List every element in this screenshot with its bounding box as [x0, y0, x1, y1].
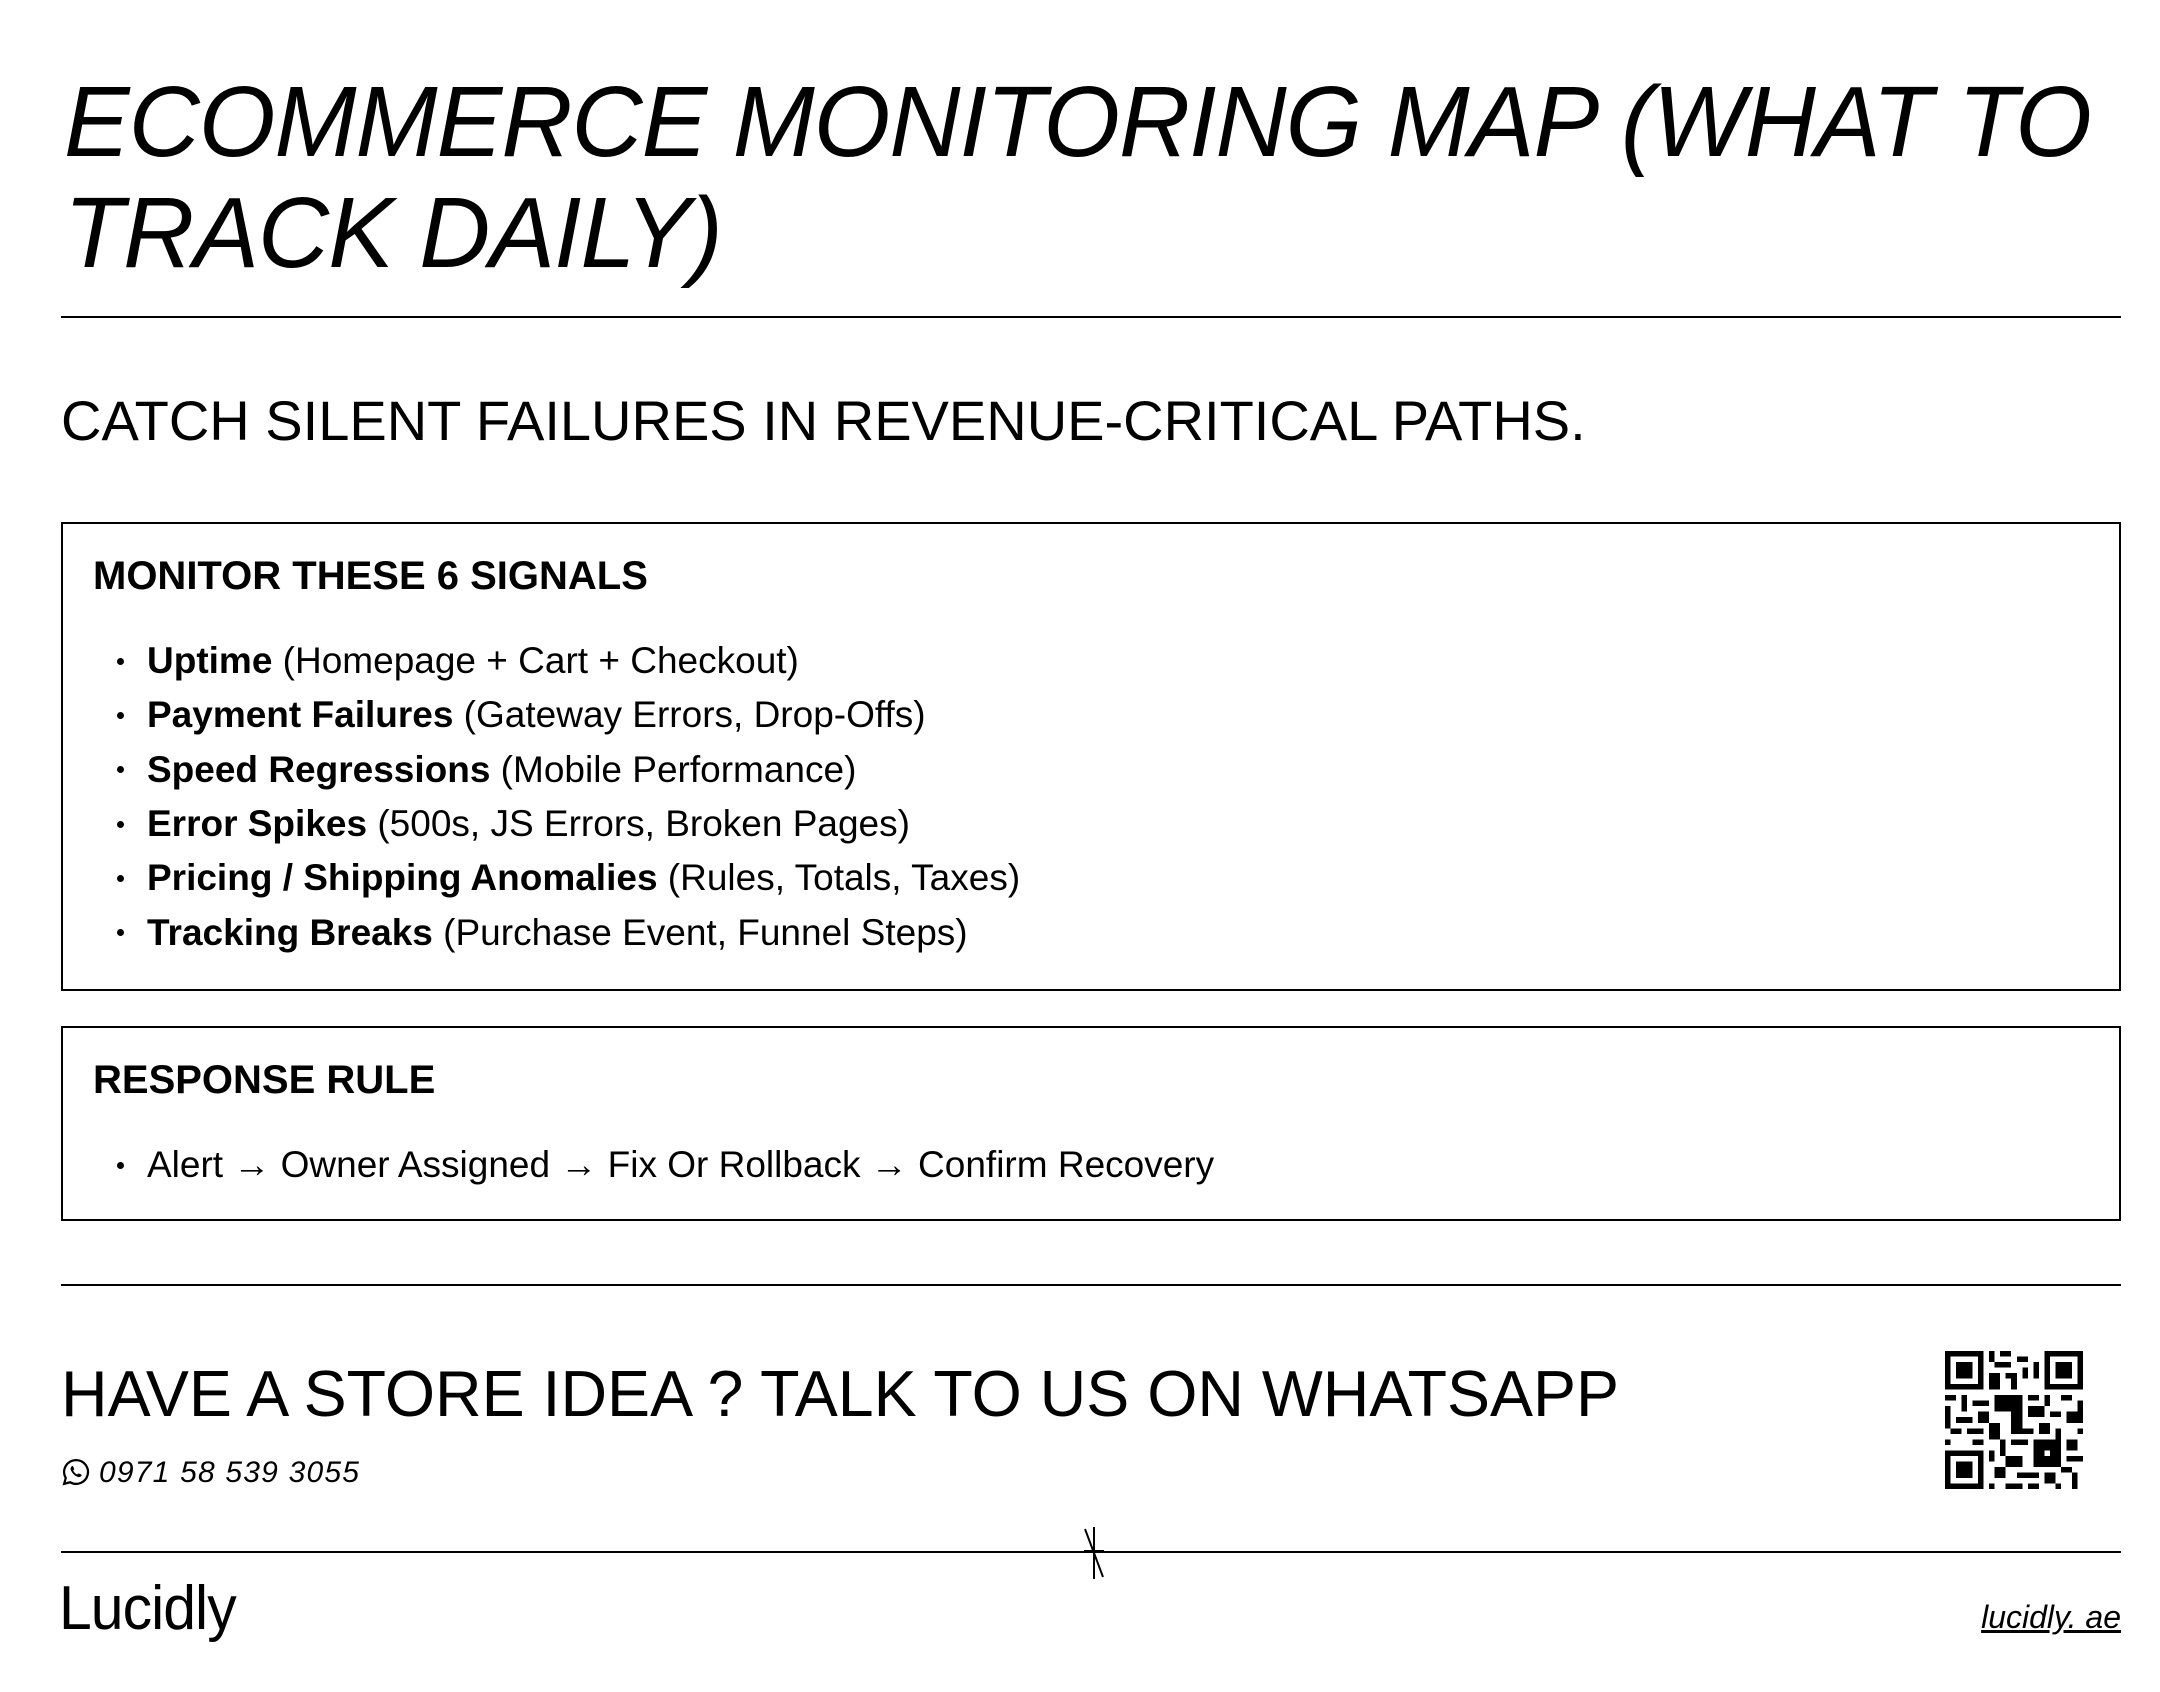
response steps: Alert → Owner Assigned → Fix Or Rollback → Confirm Recovery: [147, 1144, 1214, 1185]
signal list: Pricing / Shipping Anomalies (Rules, Totals, Taxes): [147, 857, 1020, 898]
signal list: Error Spikes (500s, JS Errors, Broken Pages): [147, 803, 910, 844]
phone with whatsapp icon: 0971 58 539 3055: [99, 1456, 360, 1489]
heading: response rule: RESPONSE RULE: [93, 1058, 435, 1102]
panel: signals: [61, 522, 2121, 991]
signal list: [117, 640, 1020, 952]
panel: response rule: [61, 1026, 2121, 1221]
QR code: [1945, 1351, 2083, 1489]
website link: lucidly. ae: [1981, 1599, 2121, 1635]
CTA heading: HAVE A STORE IDEA ? TALK TO US ON WHATSAPP: [61, 1358, 1619, 1430]
title: ECOMMERCE MONITORING MAP (WHAT TO: [64, 66, 2091, 178]
heading: monitor these 6 signals: MONITOR THESE 6 SIGNALS: [93, 554, 648, 598]
logo: Lucidly: Lucidly: [59, 1574, 236, 1643]
icon: star cross on rule: [1084, 1527, 1104, 1579]
signal list: Tracking Breaks (Purchase Event, Funnel Steps): [147, 912, 968, 952]
subtitle: CATCH SILENT FAILURES IN REVENUE-CRITICAL PATHS.: [61, 389, 1586, 452]
signal list: Payment Failures (Gateway Errors, Drop-Offs): [147, 694, 926, 735]
title: TRACK DAILY): [64, 177, 722, 289]
signal list: Uptime (Homepage + Cart + Checkout): [147, 640, 799, 681]
icon: whatsapp: [62, 1459, 90, 1486]
signal list: Speed Regressions (Mobile Performance): [147, 749, 856, 790]
title: [64, 66, 2091, 289]
